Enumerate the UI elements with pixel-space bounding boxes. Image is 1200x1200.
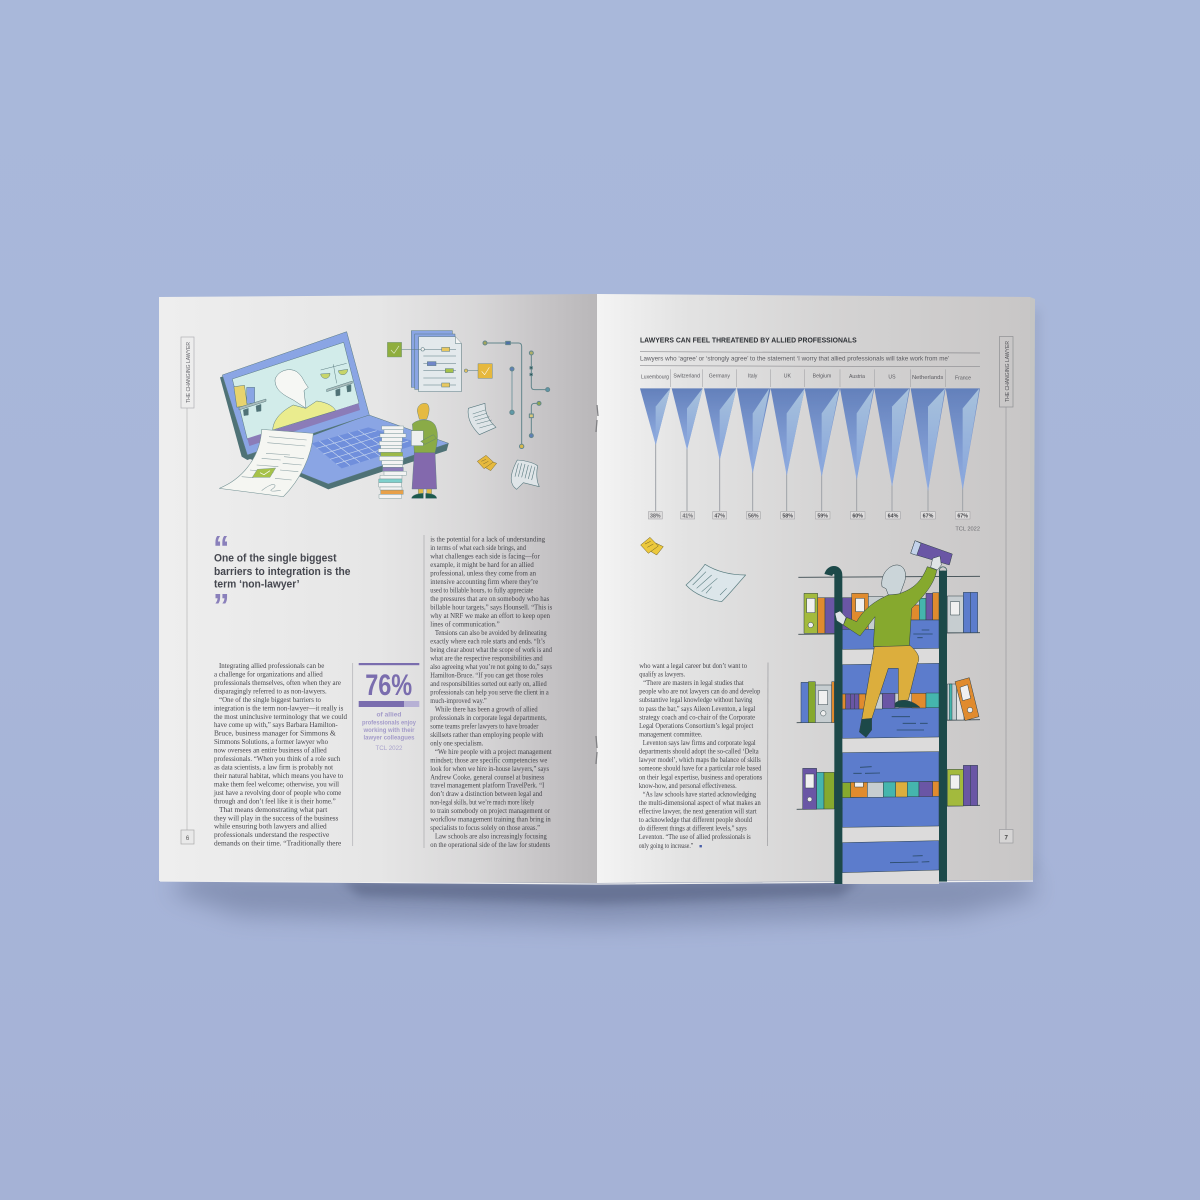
right page number: [1000, 830, 1013, 843]
body text column two: look for when we hire in-house lawyers,” says: [430, 764, 549, 773]
left page number: [181, 830, 194, 844]
body text column three: Leventon. “The use of allied professionals is: [639, 832, 751, 841]
floating paper upper: [468, 403, 496, 435]
right page: [597, 294, 1030, 883]
ladder rails: [828, 570, 943, 884]
body text column two: professionals in corporate legal departments,: [430, 713, 547, 722]
percent labels: [648, 512, 970, 519]
body text column two: travel management platform TravelPerk. “I: [430, 781, 545, 790]
body text column two: only one specialism.: [430, 738, 483, 747]
stat callout: 76%: TCL 2022: [376, 745, 403, 752]
body text column one: disparagingly referred to as non-lawyers.: [214, 686, 327, 695]
body text column three: effective lawyer, the next generation will start: [639, 806, 757, 816]
body text column two: skillsets rather than employing people with: [430, 730, 543, 739]
body text column three: departments should adopt the so-called ‘Delta: [639, 747, 759, 756]
country labels: Luxembourg: [641, 374, 669, 380]
stat callout: 76%: of allied: [377, 712, 401, 718]
body text column one: Simmons Solutions, a former lawyer who: [214, 737, 328, 746]
body text column one: have come up with,” says Barbara Hamilton-: [214, 720, 338, 729]
bar chart: lawyers threatened by allied professionals: [640, 335, 980, 533]
right page number: 7: [1004, 834, 1008, 842]
body text column two: to train somebody on project management or: [430, 806, 550, 815]
body text column three: do different things at different levels,” says: [639, 824, 747, 833]
body text column three: qualify as lawyers.: [639, 670, 685, 678]
floating paper lower: [511, 460, 539, 489]
spine staple upper: [596, 405, 598, 432]
left running head and rule: THE CHANGING LAWYER: [186, 342, 192, 403]
body text column two: mindset; those are specific competencies we: [430, 755, 548, 764]
sticky notes: [641, 537, 663, 555]
body text column two: in terms of what each side brings, and: [430, 543, 526, 552]
percent labels: 59%: [817, 513, 828, 519]
books top shelf: [804, 592, 978, 633]
stat callout: 76%: working with their: [363, 727, 415, 734]
body text column two: what are the respective responsibilities and: [430, 654, 543, 662]
body text column two: don’t draw a distinction between legal and: [430, 789, 542, 798]
body text column two: intensive accounting firm where they’re: [430, 577, 539, 586]
body text column two: While there has been a growth of allied: [435, 704, 538, 713]
opening quote mark: “: [213, 529, 230, 566]
right page edge stack: [1030, 297, 1035, 880]
body text column two: is the potential for a lack of understanding: [430, 535, 545, 544]
body text column three: strategy coach and co-chair of the Corporate: [639, 712, 756, 721]
document stack: [402, 331, 461, 392]
illustration: person climbing library ladder: [641, 537, 980, 884]
country labels: US: [888, 374, 896, 380]
body text column three: Legal Operations Consortium’s legal project: [639, 721, 754, 730]
books bottom shelf: [803, 765, 978, 809]
body text column two: workflow management training than bring in: [430, 815, 551, 824]
country labels: UK: [784, 373, 791, 379]
body text column one: make them feel welcome; otherwise, you will: [214, 779, 339, 788]
body text column two: Hamilton-Bruce. “If you can get those roles: [430, 670, 543, 679]
shadow under magazine: [170, 310, 1038, 925]
right running head and rule: THE CHANGING LAWYER: [1005, 341, 1011, 402]
body text column one: just have a revolving door of people who come: [213, 788, 342, 797]
chart subtitle: Lawyers who ‘agree’ or ‘strongly agree’ to the statement ‘I worry that allied professionals will take work from me’: [640, 355, 949, 362]
body text column two: example, it might be hard for an allied: [430, 560, 534, 569]
body text column one: Bruce, business manager for Simmons &: [214, 729, 336, 738]
body text column one: [213, 661, 347, 848]
books middle shelf: [801, 678, 979, 723]
percent labels: 47%: [714, 513, 725, 519]
book stack: [378, 426, 406, 498]
body text column two: specialists to focus solely on those areas.”: [430, 823, 540, 832]
body text column two: what challenges each side is facing—for: [430, 552, 540, 561]
laptop screen: [220, 332, 369, 460]
country labels: Netherlands: [912, 375, 944, 381]
body text column two: exactly where each role starts and ends. “It’s: [430, 636, 545, 646]
left page: [159, 294, 597, 883]
pull quote: [213, 529, 350, 624]
checkbox green: [387, 342, 402, 357]
stems: [656, 442, 963, 511]
body text column one: now oversees an entire business of allied: [214, 746, 327, 755]
body text column two: professionals can help you serve the client in a: [430, 687, 549, 696]
body text column two: on the operational side of the law for students: [430, 840, 550, 849]
body text column two: Law schools are also increasingly focusing: [435, 832, 547, 841]
shelf with books on screen: [234, 385, 266, 416]
climbing figure: [835, 541, 952, 737]
body text column two: non-legal skills, but we’re much more likely: [430, 798, 534, 807]
percent labels: 41%: [682, 513, 693, 519]
percent labels: 56%: [748, 513, 759, 519]
country labels: Belgium: [813, 374, 831, 380]
country labels: [641, 373, 971, 381]
body text column two: why at NRF we make an effort to keep open: [430, 611, 550, 620]
body text column two: lines of communication.”: [430, 620, 500, 628]
body text column three: management committee.: [639, 730, 702, 738]
person on screen: [273, 370, 336, 430]
body text column three: lawyer model’, which maps the balance of skills: [639, 755, 761, 764]
checkbox yellow: [464, 364, 492, 378]
body text column two: billable hour targets,” says Hounsell. “This is: [430, 602, 552, 612]
body text column two: also agreeing what you’re not going to do,” says: [430, 662, 552, 671]
percent labels: 64%: [888, 513, 899, 519]
body text column one: as data scientists, a law firm is probably not: [214, 762, 334, 772]
book held overhead: [911, 541, 952, 565]
chart title: LAWYERS CAN FEEL THREATENED BY ALLIED PROFESSIONALS: [640, 335, 857, 344]
percent labels: 60%: [852, 513, 863, 519]
percent labels: 67%: [957, 513, 968, 519]
body text column two: [424, 535, 552, 849]
body text column three: Leventon says law firms and corporate legal: [643, 738, 756, 747]
body text column three: the multi-dimensional aspect of what makes an: [639, 798, 761, 807]
country labels: France: [955, 375, 971, 381]
body text column two: much-improved way.”: [430, 696, 487, 705]
body text column three: to acknowledge that different people should: [639, 815, 752, 824]
woman with tablet: [411, 403, 437, 498]
body text column two: Andrew Cooke, general counsel at business: [430, 772, 544, 781]
laptop base: [243, 415, 449, 489]
body text column one: That means demonstrating what part: [219, 805, 328, 814]
stat callout: 76%: 76%: [365, 669, 412, 702]
label dividers: [670, 369, 946, 387]
pull quote: term ‘non-lawyer’: [214, 578, 300, 590]
body text column three: only going to increase.”: [639, 841, 693, 850]
body text column three: to pass the bar,” says Aileen Leventon, a legal: [639, 704, 755, 713]
body text column three: “There are masters in legal studies that: [643, 678, 744, 687]
percent labels: 38%: [650, 513, 661, 519]
body text column three: on their legal expertise, business and operations: [639, 772, 762, 781]
shelves: [797, 576, 980, 809]
body text column two: the pressures that are on somebody who has: [430, 594, 549, 603]
body text column one: a challenge for organizations and allied: [214, 670, 323, 678]
country labels: Italy: [748, 373, 758, 379]
contract paper: [219, 429, 313, 497]
body text column three: know-how, and personal effectiveness.: [639, 781, 737, 790]
chart source: TCL 2022: [955, 527, 980, 533]
country labels: Austria: [849, 374, 865, 380]
body text column one: while ensuring both lawyers and allied: [214, 822, 327, 831]
percent labels: 67%: [923, 513, 934, 519]
body text column three: “As law schools have started acknowledging: [643, 789, 756, 798]
triangles: [640, 388, 980, 491]
body text column three: substantive legal knowledge without having: [639, 695, 752, 704]
bottom paper edge: [160, 881, 1033, 884]
stat callout: 76%: lawyer colleagues: [364, 735, 415, 742]
body text column one: the most uninclusive terminology that we could: [214, 712, 347, 721]
stat callout: 76%: [353, 663, 419, 846]
body text column one: professionals understand the respective: [214, 830, 330, 839]
ladder rungs and inner books: [842, 620, 939, 884]
body text column one: Integrating allied professionals can be: [219, 661, 325, 670]
left page number: 6: [186, 836, 190, 842]
scales on screen: [321, 363, 352, 396]
illustration: laptop video call and documents: [219, 331, 550, 498]
right running head and rule: [1000, 336, 1013, 830]
body text column one: professionals. “When you think of a role such: [214, 754, 340, 763]
body text column one: “One of the single biggest barriers to: [219, 695, 321, 704]
body text column one: through and don’t feel like it is their home.”: [214, 796, 336, 805]
connector diagrams: [483, 341, 550, 448]
pull quote: One of the single biggest: [214, 552, 337, 564]
sticky notes: [477, 455, 497, 471]
body text column one: integration is the term non-lawyer—it really is: [214, 703, 343, 712]
body text column two: professional, unless they come from an: [430, 569, 536, 578]
body text column two: used to billable hours, to fully appreciate: [430, 586, 534, 594]
body text column one: they will play in the success of the business: [214, 813, 338, 822]
body text column two: and responsibilities sorted out early on, allied: [430, 679, 547, 688]
body text column two: Tensions can also be avoided by delineating: [435, 628, 547, 637]
body text column two: being clear about what the scope of work is and: [430, 645, 552, 654]
stat callout: 76%: professionals enjoy: [362, 719, 416, 726]
body text column one: demands on their time. “Traditionally there: [214, 839, 342, 848]
country labels: Switzerland: [673, 373, 700, 379]
body text column two: “We hire people with a project management: [435, 747, 552, 756]
body text column two: some teams prefer lawyers to have broader: [430, 721, 539, 730]
body text column three: people who are not lawyers can do and develop: [639, 687, 760, 696]
country labels: Germany: [709, 373, 730, 379]
spine staple lower: [596, 736, 597, 764]
body text column three: [639, 661, 768, 850]
closing quote mark: ”: [213, 587, 230, 624]
body text column three: someone should have for a particular role based: [639, 764, 761, 773]
pull quote: barriers to integration is the: [214, 566, 350, 578]
left running head and rule: [181, 337, 194, 830]
body text column three: who want a legal career but don’t want to: [639, 661, 747, 670]
percent labels: 58%: [782, 513, 793, 519]
floating paper: [686, 564, 746, 602]
body text column one: their natural habitat, which means you have to: [214, 771, 343, 780]
body text column one: professionals themselves, often when they are: [214, 678, 342, 687]
